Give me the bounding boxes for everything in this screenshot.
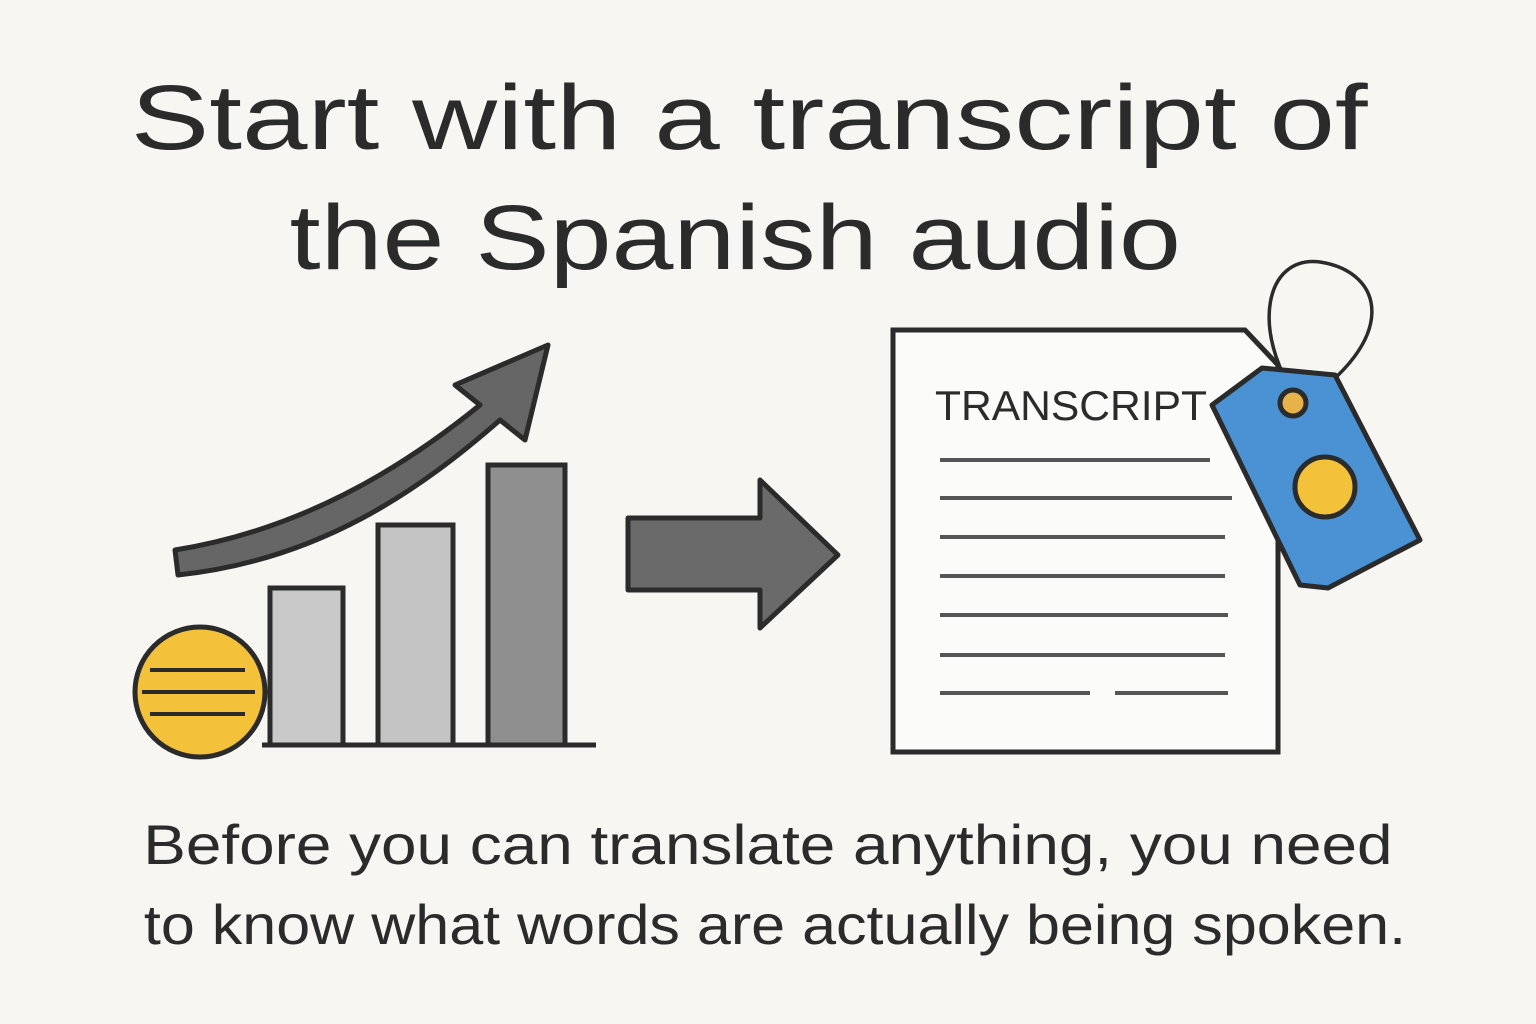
title: the Spanish audio [289, 187, 1181, 289]
document: transcript [893, 330, 1278, 752]
chart: bars with coin [135, 465, 596, 757]
caption: to know what words are actually being spoken. [144, 893, 1406, 956]
document: transcript: TRANSCRIPT [935, 382, 1207, 429]
title: Start with a transcript of [131, 67, 1367, 169]
icon: rising curved arrow [175, 345, 548, 575]
caption: Before you can translate anything, you need [143, 813, 1393, 876]
caption [143, 813, 1406, 956]
title [131, 67, 1368, 289]
arrow: right block arrow [628, 480, 838, 628]
icon: blue tag [1212, 262, 1420, 588]
